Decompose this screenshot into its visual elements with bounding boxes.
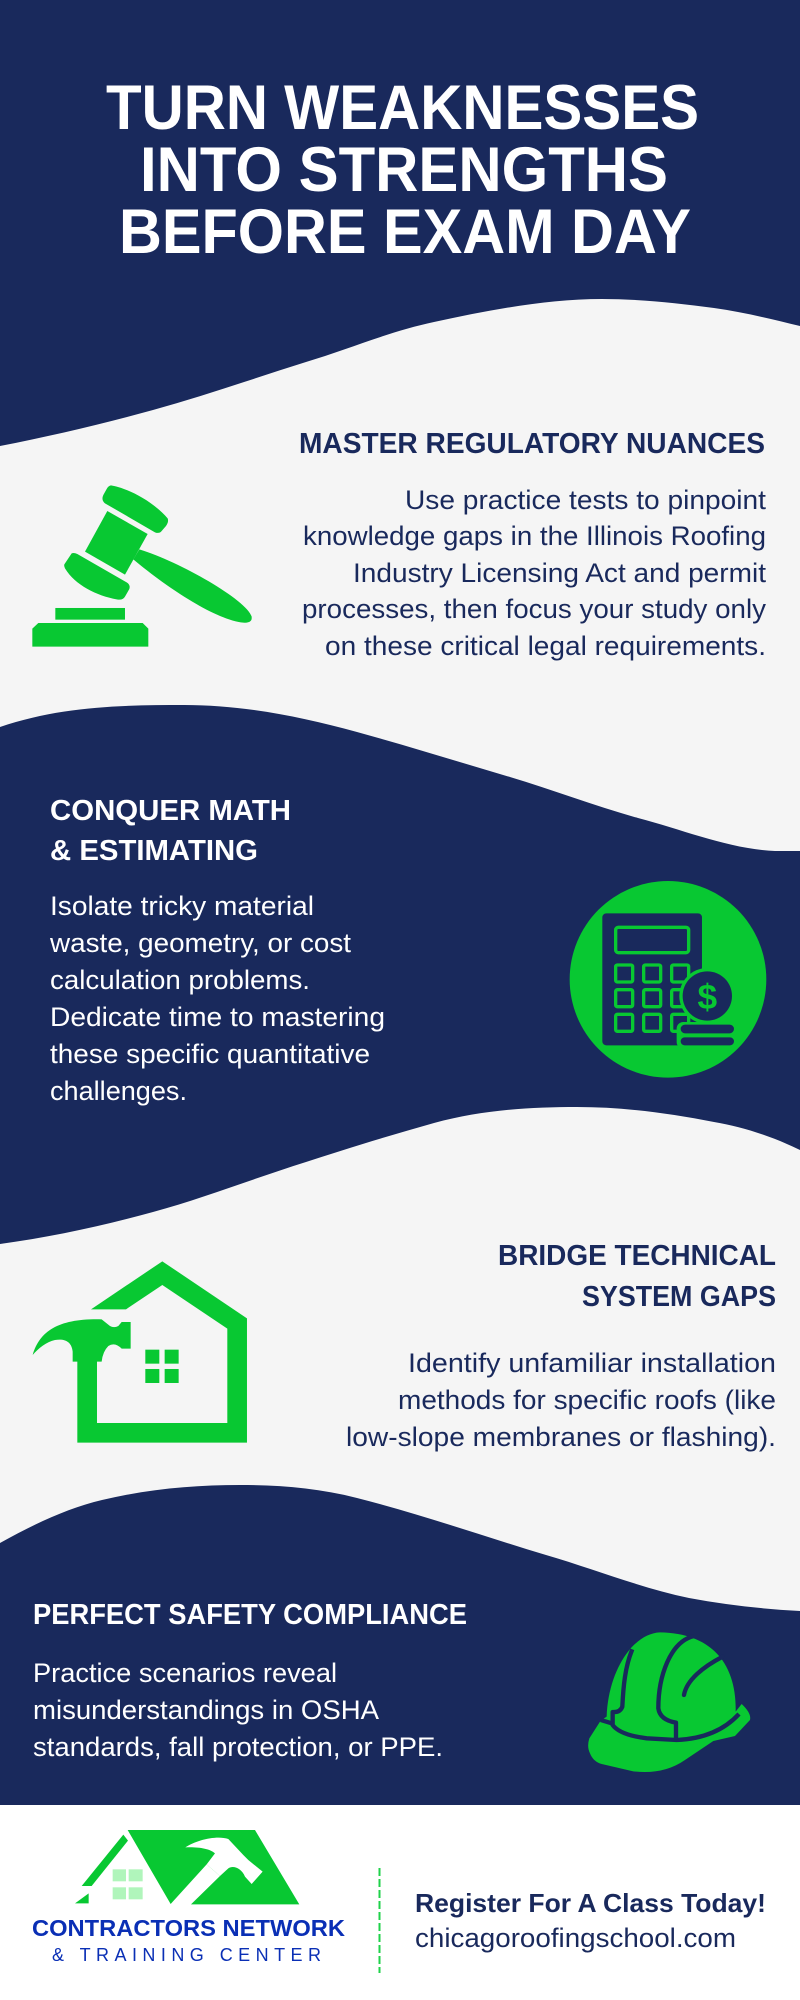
text block: regulatory body: Use practice tests to pinpoint — [405, 485, 767, 515]
text block: math body — [49, 891, 385, 1106]
text block: math body: waste, geometry, or cost — [49, 928, 352, 958]
logo name: CONTRACTORS NETWORK — [32, 1915, 345, 1941]
panel: conquer math and estimating — [49, 795, 766, 1106]
logo: contractors network and training center — [32, 1830, 345, 1965]
text block: math body: calculation problems. — [50, 965, 310, 995]
logo icon: roof with hammer — [75, 1830, 299, 1904]
panel: master regulatory nuances — [32, 428, 767, 661]
heading: conquer math — [50, 795, 291, 867]
white footer panel — [0, 1805, 800, 2000]
icon: gavel — [32, 485, 252, 647]
heading: perfect safety compliance: PERFECT SAFETY COMPLIANCE — [33, 1599, 467, 1631]
text block: regulatory body: Industry Licensing Act and permit — [353, 558, 767, 588]
panel: perfect safety compliance — [33, 1599, 750, 1772]
heading: bridge technical — [498, 1240, 776, 1313]
title: TURN WEAKNESSES — [106, 73, 699, 143]
dashed divider — [378, 1868, 380, 1973]
heading: master regulatory nuances: MASTER REGULATORY NUANCES — [299, 428, 765, 460]
text block: safety body: misunderstandings in OSHA — [33, 1695, 379, 1725]
navy band: math section — [0, 705, 800, 1244]
text block: technical body — [346, 1348, 776, 1452]
text block: technical body: Identify unfamiliar installation — [408, 1348, 776, 1378]
navy band: safety section — [0, 1485, 800, 1806]
title: BEFORE EXAM DAY — [119, 197, 691, 267]
heading: conquer math: & ESTIMATING — [50, 835, 258, 867]
panel: bridge technical system gaps — [33, 1240, 776, 1452]
heading: bridge technical: BRIDGE TECHNICAL — [498, 1240, 776, 1272]
call to action: Register For A Class Today! — [415, 1888, 766, 1918]
text block: regulatory body: knowledge gaps in the Illinois Roofing — [303, 521, 766, 551]
panel: footer — [32, 1830, 766, 1973]
icon: hard hat — [588, 1632, 750, 1772]
title — [106, 73, 699, 267]
icon: calculator with coins: $ — [697, 978, 717, 1017]
text block: safety body: Practice scenarios reveal — [33, 1658, 337, 1688]
text block: safety body — [33, 1658, 443, 1762]
icon: house with hammer — [33, 1261, 247, 1443]
heading: conquer math: CONQUER MATH — [50, 795, 291, 827]
icon: calculator with coins — [570, 881, 766, 1078]
text block: regulatory body: processes, then focus your study only — [302, 594, 767, 624]
text block: math body: Dedicate time to mastering — [50, 1002, 385, 1032]
text block: math body: Isolate tricky material — [50, 891, 314, 921]
title: INTO STRENGTHS — [140, 135, 668, 205]
text block: technical body: methods for specific roofs (like — [398, 1385, 776, 1415]
text block: technical body: low-slope membranes or flashing). — [346, 1422, 776, 1452]
text block: math body: challenges. — [50, 1076, 187, 1106]
heading: bridge technical: SYSTEM GAPS — [582, 1281, 776, 1313]
text block: math body: these specific quantitative — [50, 1039, 370, 1069]
text block: regulatory body: on these critical legal requirements. — [325, 631, 766, 661]
navy header wave — [0, 0, 800, 446]
logo tagline: & TRAINING CENTER — [52, 1945, 321, 1965]
text block: safety body: standards, fall protection, or PPE. — [33, 1732, 443, 1762]
website: chicagoroofingschool.com — [415, 1923, 736, 1953]
text block: regulatory body — [302, 485, 767, 661]
